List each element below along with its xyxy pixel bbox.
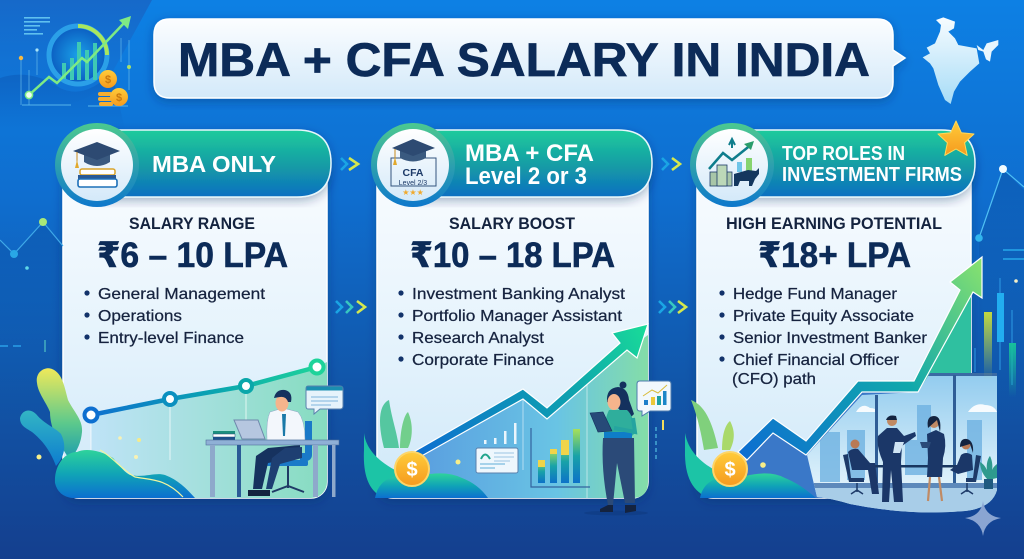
rising salary line chart xyxy=(84,360,327,498)
icon: star xyxy=(938,121,974,155)
plant xyxy=(980,456,997,489)
label: HIGH EARNING POTENTIAL xyxy=(726,215,942,233)
card 1 xyxy=(63,150,327,498)
label: SALARY RANGE xyxy=(129,215,255,233)
bullet list: Senior Investment Banker xyxy=(733,330,928,347)
bullet list: (CFO) path xyxy=(732,371,816,388)
icon: CFA badge: CFA xyxy=(402,167,424,179)
pill header xyxy=(735,130,975,197)
heading: TOP ROLES IN xyxy=(782,143,905,165)
bullet list xyxy=(719,286,928,388)
icon: CFA badge xyxy=(371,123,455,207)
icon: India map xyxy=(923,17,998,104)
left decorative line xyxy=(0,218,63,352)
bullet list: Research Analyst xyxy=(412,330,545,347)
leaves, wave and coin xyxy=(685,400,816,498)
icon: growth chart with coins: $ xyxy=(116,92,122,104)
chat bubble xyxy=(306,386,343,414)
heading xyxy=(465,140,594,190)
heading xyxy=(782,143,962,186)
heading: MBA ONLY xyxy=(152,151,276,177)
small bars xyxy=(484,423,516,444)
person at desk xyxy=(206,390,339,497)
leaves, wave and coin: $ xyxy=(724,459,736,481)
card 2 xyxy=(377,150,648,498)
bullet list: Hedge Fund Manager xyxy=(733,286,898,303)
bullet list: Corporate Finance xyxy=(412,352,554,369)
bullet list: Entry-level Finance xyxy=(98,330,244,347)
card 3 xyxy=(697,150,971,498)
right decorative candles and line xyxy=(975,165,1024,397)
bullet list: Investment Banking Analyst xyxy=(412,286,626,303)
arrow: upper chevrons 2 xyxy=(662,158,680,170)
icon: growth chart with coins: $ xyxy=(105,74,111,86)
rising arrow chart xyxy=(400,324,648,498)
bullet list xyxy=(398,286,626,369)
arrow: lower chevrons 1 xyxy=(336,301,365,313)
pill header xyxy=(415,130,652,197)
bar chart xyxy=(531,428,590,487)
woman with tablet xyxy=(584,382,648,516)
bullet list xyxy=(84,286,266,347)
standing man xyxy=(878,416,916,502)
icon: CFA badge: Level 2/3 xyxy=(399,180,427,187)
label: SALARY BOOST xyxy=(449,215,575,233)
arrow: lower chevrons 2 xyxy=(659,301,686,313)
bullet list: Private Equity Associate xyxy=(733,308,914,325)
icon: growth chart with coins xyxy=(19,16,131,106)
bullet list: Chief Financial Officer xyxy=(733,352,900,369)
bullet list: Portfolio Manager Assistant xyxy=(412,308,623,325)
panel: MBA + CFA xyxy=(364,123,671,516)
salary figure: ₹18+ LPA xyxy=(758,236,911,275)
bullet list: Operations xyxy=(98,308,182,325)
heading: MBA + CFA xyxy=(465,140,594,167)
panel: top roles xyxy=(685,121,1000,515)
icon: bottom sparkle xyxy=(965,501,1001,536)
icon: buildings, growth and bull xyxy=(690,123,774,207)
panel: MBA only xyxy=(20,123,343,498)
seated woman xyxy=(950,439,981,494)
dashboard card xyxy=(476,448,518,473)
bullet list: General Management xyxy=(98,286,266,303)
leaves and wave xyxy=(20,368,195,498)
icon: CFA badge: ★★★ xyxy=(402,188,424,197)
salary figure: ₹6 – 10 LPA xyxy=(97,236,288,275)
heading: Level 2 or 3 xyxy=(465,163,587,190)
arrow: upper chevrons 1 xyxy=(341,158,358,170)
title banner xyxy=(154,19,905,98)
rising arrow xyxy=(738,257,982,460)
icon: graduation cap and books xyxy=(55,123,139,207)
leaves, wave and coin: $ xyxy=(406,459,418,481)
title: MBA + CFA SALARY IN INDIA xyxy=(178,33,870,86)
heading: INVESTMENT FIRMS xyxy=(782,164,962,186)
sparkle dots xyxy=(656,420,663,462)
pill header xyxy=(100,130,331,197)
salary figure: ₹10 – 18 LPA xyxy=(410,236,615,275)
leaves, wave and coin xyxy=(364,400,488,498)
standing woman xyxy=(920,416,945,501)
speech bubble chart xyxy=(637,381,671,416)
office scene xyxy=(800,370,1000,515)
seated man xyxy=(843,440,879,494)
area under arrow xyxy=(746,392,908,498)
